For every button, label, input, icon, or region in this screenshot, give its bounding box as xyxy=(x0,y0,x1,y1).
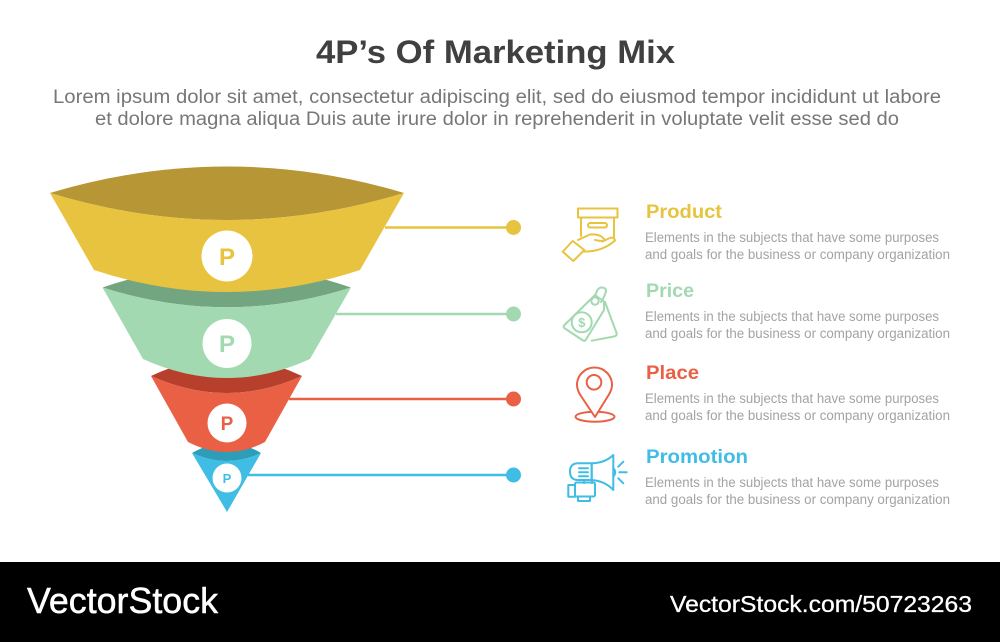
text block: promotion: Promotion xyxy=(646,447,748,468)
funnel: promotion segment: P xyxy=(223,471,232,486)
text block: price: Price xyxy=(646,281,694,302)
connector: place xyxy=(289,392,521,406)
subtitle xyxy=(53,87,941,130)
text block: price xyxy=(645,281,950,341)
funnel: price segment xyxy=(102,266,351,378)
subtitle: Lorem ipsum dolor sit amet, consectetur adipiscing elit, sed do eiusmod tempor incididunt ut labore xyxy=(53,87,941,108)
text block: product: Elements in the subjects that have some purposes xyxy=(645,230,939,245)
text block: promotion: Elements in the subjects that have some purposes xyxy=(645,475,939,490)
title: 4P’s Of Marketing Mix xyxy=(316,34,675,70)
text block: place: and goals for the business or company organization xyxy=(645,408,950,423)
footer bar: VectorStock.com/50723263 xyxy=(670,591,972,617)
text block: price: and goals for the business or company organization xyxy=(645,326,950,341)
funnel: promotion segment xyxy=(192,443,261,512)
funnel: place segment xyxy=(151,358,302,452)
icon: map pin xyxy=(576,368,614,422)
text block: product: Product xyxy=(646,202,723,223)
text block: product: and goals for the business or company organization xyxy=(645,247,950,262)
text block: promotion xyxy=(645,447,950,507)
connector: price xyxy=(336,306,521,322)
icon: megaphone xyxy=(568,455,627,501)
icon: price tags xyxy=(564,288,617,341)
funnel: product segment: P xyxy=(219,244,235,271)
text block: place: Place xyxy=(646,363,699,384)
connector: product xyxy=(385,220,521,235)
footer bar: VectorStock xyxy=(27,580,219,621)
text block: price: Elements in the subjects that have some purposes xyxy=(645,309,939,324)
text block: promotion: and goals for the business or company organization xyxy=(645,492,950,507)
footer bar xyxy=(0,562,1000,642)
subtitle: et dolore magna aliqua Duis aute irure dolor in reprehenderit in voluptate velit esse sed do xyxy=(95,109,899,130)
funnel: place segment: P xyxy=(221,414,234,435)
icon: hand holding box xyxy=(563,208,618,261)
connector: promotion xyxy=(248,468,521,482)
funnel: product segment xyxy=(50,166,404,292)
text block: place: Elements in the subjects that have some purposes xyxy=(645,391,939,406)
funnel: price segment: P xyxy=(219,331,235,358)
text block: product xyxy=(645,202,950,262)
icon: price tags: $ xyxy=(578,315,586,330)
text block: place xyxy=(645,363,950,423)
